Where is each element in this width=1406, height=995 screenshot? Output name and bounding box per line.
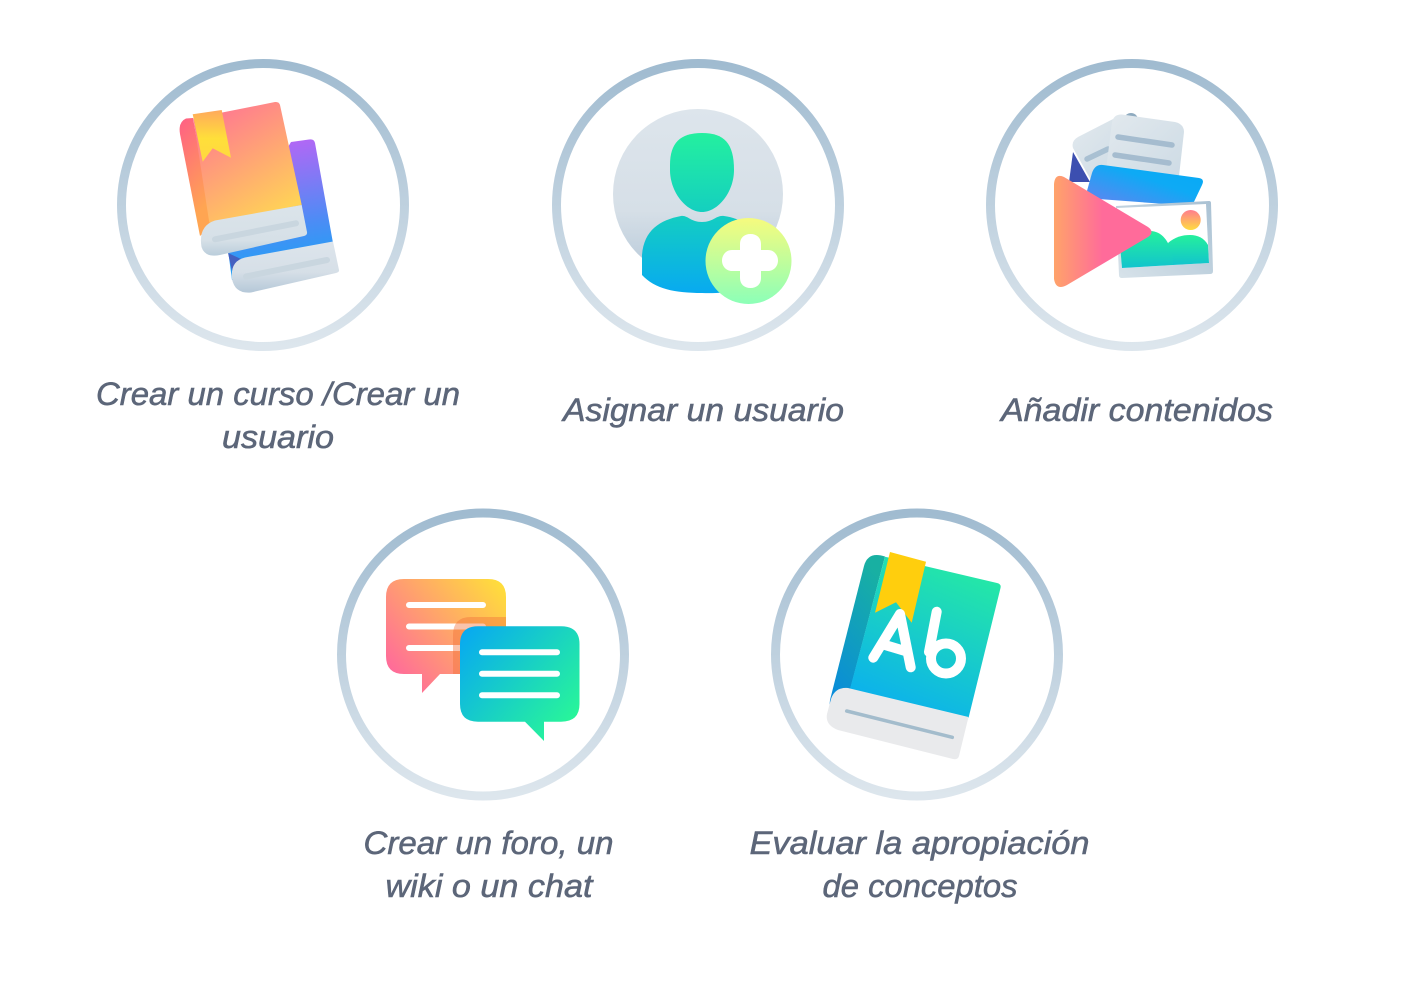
label 1: usuario: [222, 419, 334, 455]
label 4: wiki o un chat: [386, 868, 594, 904]
label 5: [750, 825, 1090, 904]
ring 5: [776, 513, 1058, 796]
icon: user with plus: [613, 109, 792, 304]
item: crear un foro: [342, 513, 624, 904]
label 1: Crear un curso /Crear un: [96, 376, 460, 412]
label 2: Asignar un usuario: [561, 392, 844, 428]
ring 2: [556, 64, 840, 346]
icon: dictionary book: [827, 552, 1001, 759]
item: asignar un usuario: [556, 64, 844, 428]
item: crear un curso: [96, 64, 460, 455]
label 5: Evaluar la apropiación: [750, 825, 1090, 861]
label 3: Añadir contenidos: [999, 392, 1273, 428]
icon: chat bubbles: [386, 579, 580, 741]
item: evaluar: [750, 513, 1090, 904]
ring 1: [122, 64, 404, 346]
label 4: [364, 825, 614, 904]
label 5: de conceptos: [822, 868, 1018, 904]
icon: books: [180, 102, 339, 293]
label 4: Crear un foro, un: [364, 825, 614, 861]
label 1: [96, 376, 460, 455]
item: anadir contenidos: [990, 64, 1274, 428]
ring 4: [342, 513, 624, 796]
icon: media contents: [1054, 113, 1213, 287]
ring 3: [990, 64, 1274, 346]
